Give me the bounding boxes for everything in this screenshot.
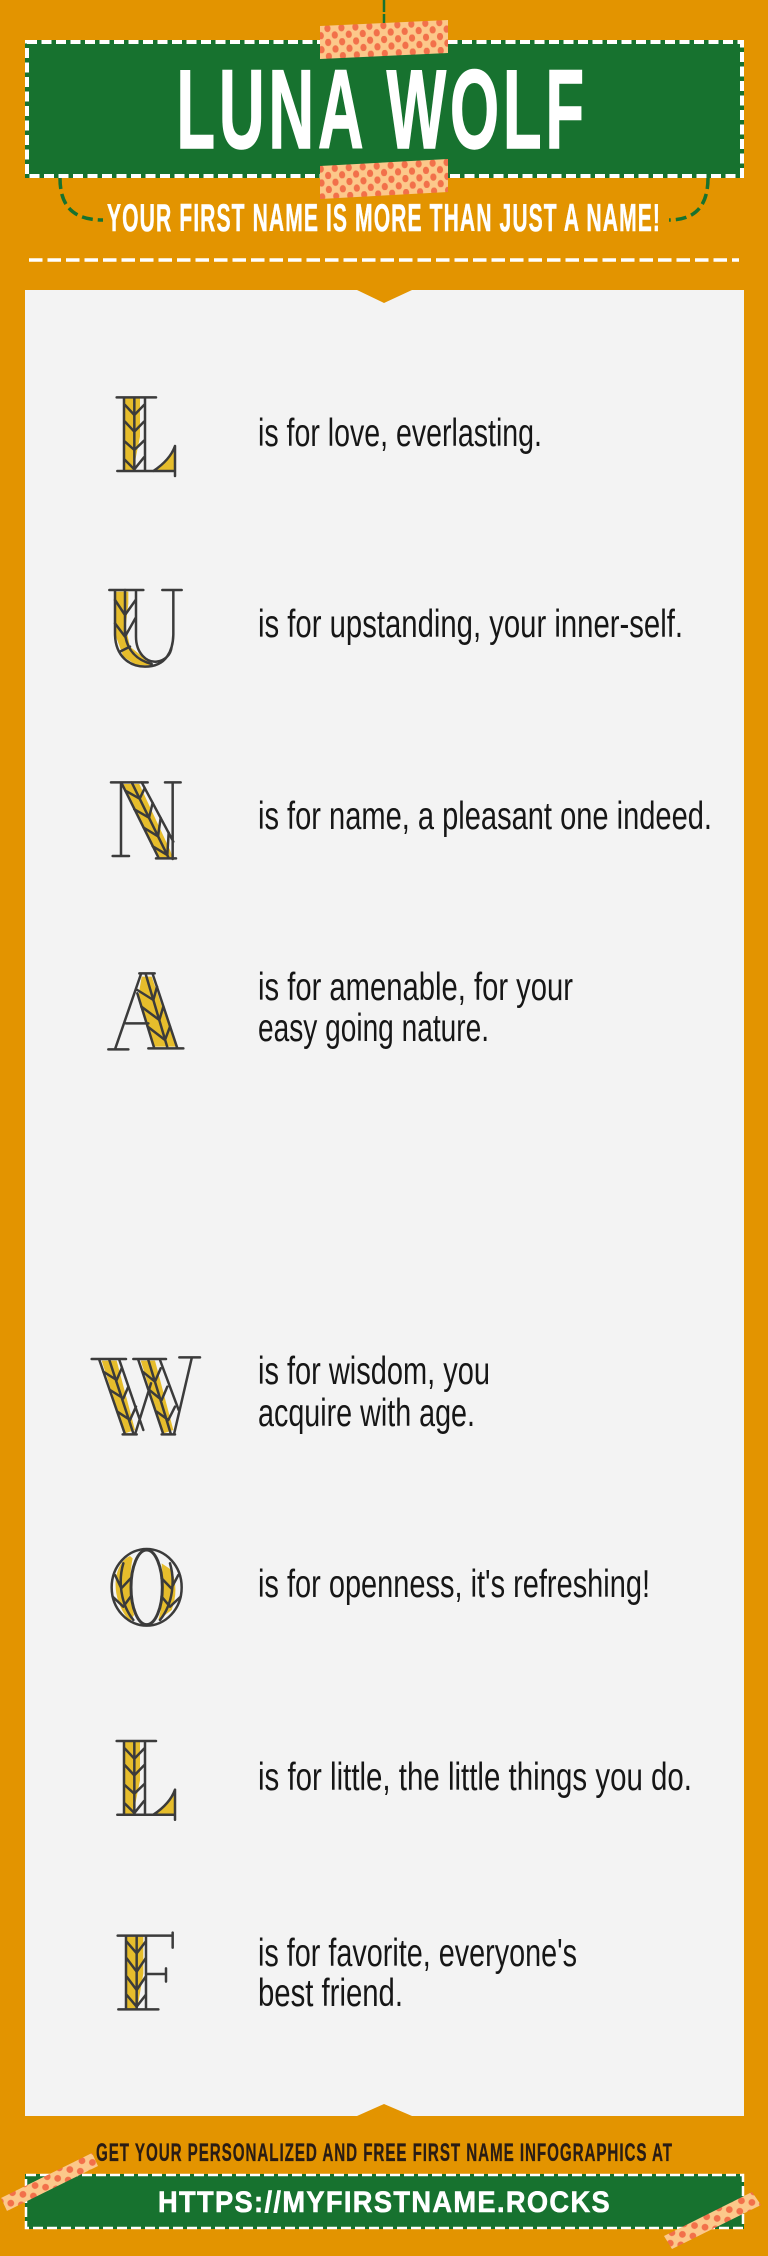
text: W: acquire with age. bbox=[258, 1392, 475, 1435]
footer banner bbox=[25, 2174, 744, 2229]
footer url: HTTPS://MYFIRSTNAME.ROCKS bbox=[158, 2186, 611, 2219]
tape: banner bottom bbox=[320, 159, 448, 199]
tape: footer right bbox=[664, 2192, 761, 2249]
letter F bbox=[118, 1933, 173, 2009]
letter O bbox=[112, 1549, 182, 1626]
dashed connector: left bbox=[60, 178, 103, 220]
tape: footer left bbox=[1, 2153, 98, 2211]
letter W bbox=[92, 1357, 200, 1434]
text: A: is for amenable, for your bbox=[258, 966, 573, 1009]
text: F: is for favorite, everyone's bbox=[258, 1932, 577, 1975]
panel: letters bbox=[25, 290, 744, 2116]
letter N bbox=[111, 782, 181, 859]
tape: banner top bbox=[320, 20, 448, 59]
text: F bbox=[258, 1932, 577, 2015]
letter A bbox=[108, 973, 183, 1049]
title banner bbox=[25, 40, 744, 178]
dashed connector: right bbox=[669, 178, 708, 220]
text: W bbox=[258, 1350, 490, 1435]
text: A: easy going nature. bbox=[258, 1007, 489, 1050]
text: A bbox=[258, 966, 573, 1050]
text: F: best friend. bbox=[258, 1972, 403, 2015]
text: L: is for love, everlasting. bbox=[258, 412, 542, 455]
text: W: is for wisdom, you bbox=[258, 1350, 490, 1393]
letter U bbox=[109, 590, 182, 667]
letter L bbox=[117, 1741, 175, 1820]
header string bbox=[383, 0, 385, 24]
letter L bbox=[117, 397, 175, 476]
